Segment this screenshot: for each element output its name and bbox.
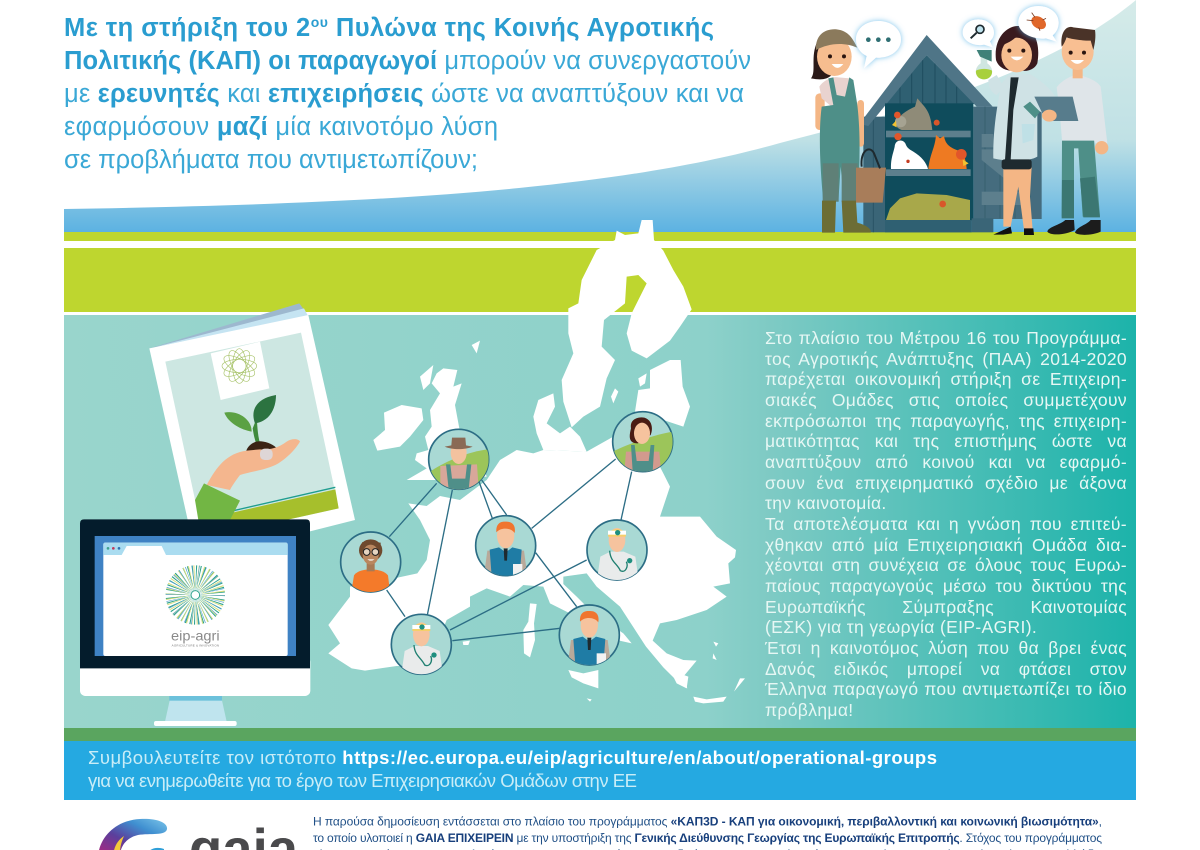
hen: orange — [928, 135, 967, 169]
text block: operational groups explanation: παρέχεται οικονομική στήριξη σε Επιχειρη- — [765, 369, 1127, 389]
text block: operational groups explanation: σουν ένα επιχειρηματικό σχέδιο με άξονα — [765, 473, 1127, 493]
person circle: consultant — [559, 605, 619, 666]
heading: Πολιτικής (ΚΑΠ) οι παραγωγοί μπορούν να συνεργαστούν — [64, 47, 751, 75]
link banner text: για να ενημερωθείτε για το έργο των Επιχειρησιακών Ομάδων στην ΕΕ — [88, 770, 637, 791]
illustration: farmer, scientist and adviser at henhouse — [811, 6, 1108, 235]
flask — [976, 55, 992, 79]
speech bubble: dots — [856, 21, 901, 68]
link banner text: Συμβουλευτείτε τον ιστότοπο https://ec.europa.eu/eip/agriculture/en/about/operational-groups — [88, 747, 937, 768]
footer text: το οποίο υλοποιεί η GAIA ΕΠΙΧΕΙΡΕΙΝ με την υποστήριξη της Γενικής Διεύθυνσης Γεωργίας της Ευρωπαϊκής Επιτροπής. Στόχος του προγράμματος — [313, 831, 1102, 845]
text block: operational groups explanation: Δανός ειδικός μπορεί να φτάσει στον — [765, 658, 1127, 678]
dark green strip — [64, 728, 1136, 741]
text block: operational groups explanation: εκπρόσωποι της παραγωγής, της επιχειρη- — [765, 411, 1127, 431]
green banner — [64, 248, 1136, 312]
mainland Europe — [328, 433, 736, 688]
bucket — [856, 168, 886, 203]
person circle: farmer man — [429, 429, 489, 489]
heading: ου — [311, 14, 328, 30]
person circle: consultant — [476, 516, 536, 576]
text block: operational groups explanation: παίους παραγωγούς μέσω του δικτύου της — [765, 576, 1127, 596]
rosette logo — [221, 348, 258, 384]
heading: εφαρμόσουν μαζί μία καινοτόμο λύση — [64, 113, 498, 141]
text block: operational groups explanation: Ευρωπαϊκής Σύμπραξης Καινοτομίας — [765, 597, 1127, 617]
heading: Πυλώνα της Κοινής Αγροτικής — [328, 14, 714, 42]
Denmark — [533, 393, 587, 452]
person: scientist woman — [976, 26, 1057, 235]
map: Europe with connected people — [328, 220, 745, 703]
text block: operational groups explanation: πρόβλημα! — [765, 700, 854, 720]
text block: operational groups explanation: Έλληνα παραγωγό που αντιμετωπίζει το ίδιο — [765, 679, 1127, 699]
person circle: farmer woman — [613, 412, 673, 472]
speech bubble: magnifier — [963, 19, 994, 47]
seedling — [253, 418, 260, 445]
panel: teal map background — [64, 315, 1136, 728]
green ground strip — [64, 232, 1136, 241]
monitor with eip-agri site — [80, 519, 310, 726]
heading: σε προβλήματα που αντιμετωπίζουν; — [64, 146, 478, 174]
network lines — [387, 459, 632, 641]
henhouse — [859, 35, 1042, 232]
text block: operational groups explanation: Τα αποτελέσματα και η γνώση που επιτεύ- — [765, 514, 1127, 534]
top wave background — [64, 0, 1136, 232]
person: man with tablet — [1034, 27, 1108, 235]
monitor with eip-agri site: eip-agri — [171, 628, 220, 644]
text block: operational groups explanation: τος Αγροτικής Ανάπτυξης (ΠΑΑ) 2014-2020 — [765, 349, 1127, 369]
panel: blue link banner — [64, 741, 1136, 800]
text block: operational groups explanation: χέονται στη συνέχεια σε όλους τους Ευρω- — [765, 555, 1127, 575]
text block: operational groups explanation — [764, 328, 1127, 720]
person circle: doctor — [587, 520, 647, 580]
hand — [207, 439, 300, 490]
person circle: doctor — [391, 614, 451, 674]
monitor with eip-agri site: AGRICULTURE & INNOVATION — [172, 644, 219, 648]
gaia logo — [98, 817, 299, 850]
text block: operational groups explanation: σιακές Ομάδες στις οποίες συμμετέχουν — [765, 390, 1127, 410]
text block: operational groups explanation: (ΕΣΚ) για τη γεωργία (EIP-AGRI). — [765, 617, 1037, 637]
hen: white — [891, 141, 928, 169]
text block: operational groups explanation: την καινοτομία. — [765, 493, 887, 513]
Great Britain — [407, 368, 487, 480]
link banner text — [88, 747, 937, 791]
eip-agri starburst logo — [175, 575, 215, 615]
footer text — [313, 814, 1102, 850]
text block: operational groups explanation: Στο πλαίσιο του Μέτρου 16 του Προγράμμα- — [765, 328, 1127, 348]
person circle: woman with glasses — [341, 532, 401, 592]
Ireland — [373, 405, 423, 451]
speech bubble: beetle — [1018, 6, 1059, 42]
Scandinavia — [562, 220, 692, 427]
footer text: Η παρούσα δημοσίευση εντάσσεται στο πλαίσιο του προγράμματος «ΚΑΠ3D - ΚΑΠ για οικονομική, περιβαλλοντική και κοινωνική βιωσιμότητα», — [313, 814, 1102, 828]
text block: operational groups explanation: ματικότητας και της επιστήμης ώστε να — [765, 431, 1127, 451]
hen: grey — [896, 98, 932, 130]
person: farmer woman — [811, 29, 886, 233]
heading — [64, 14, 751, 174]
text block: operational groups explanation: χθηκαν από μία Επιχειρησιακή Ομάδα δια- — [765, 535, 1127, 555]
Mediterranean and northern islands — [420, 341, 745, 703]
Baltic states — [635, 360, 690, 427]
heading: με ερευνητές και επιχειρήσεις ώστε να αναπτύξουν και να — [64, 80, 744, 108]
sleeve — [195, 483, 240, 520]
heading: Με τη στήριξη του 2 — [64, 14, 310, 42]
text block: operational groups explanation: αναπτύξουν από κοινού και να εφαρμό- — [765, 452, 1127, 472]
text block: operational groups explanation: Έτσι η καινοτόμος λύση που θα βρει ένας — [765, 638, 1127, 658]
booklet with seedling in hand — [149, 303, 355, 560]
